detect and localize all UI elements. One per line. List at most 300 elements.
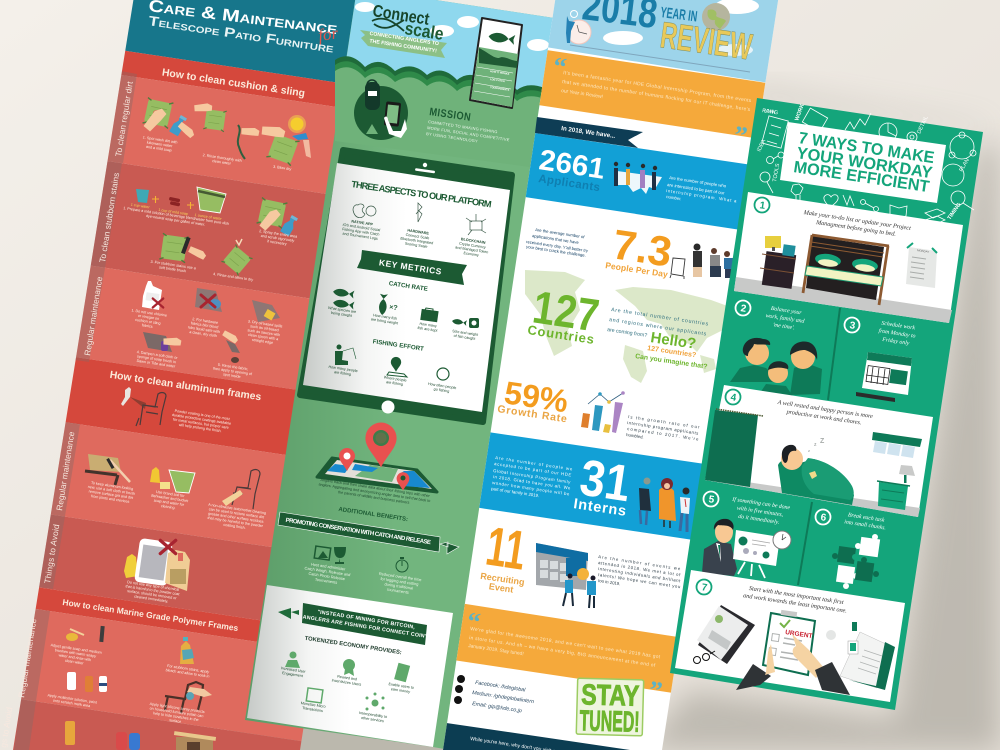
things to avoid: chemicals: that is harmful to the powder coat <box>125 584 180 596</box>
step: spot wash: and a mild soap <box>146 145 172 153</box>
stat: 2661 applicants: Applicants <box>538 173 601 194</box>
tokenized labels <box>280 666 414 724</box>
marine grade steps: For stubborn stains, apply <box>167 664 209 674</box>
title box: MORE EFFICIENT <box>792 158 931 196</box>
tokenized labels: Transactions <box>302 706 323 713</box>
stat: 11 recruiting event: attended in 2018. We met a lot of <box>598 560 681 577</box>
quote intro: that we attended to the number of humans flocking for our IT challenge, here's <box>562 79 751 113</box>
step 4 <box>705 385 933 517</box>
marine grade steps: help to hide scratches in the <box>153 711 199 722</box>
stat: 11 recruiting event: talents! We hope we can meet you <box>598 572 681 589</box>
heading: aluminum frames: How to clean aluminum frames <box>109 370 262 403</box>
benefit: photo release tournaments: Host and administer <box>311 561 346 572</box>
step: do not use chlorine <box>129 281 167 331</box>
title box <box>780 122 946 203</box>
step: maintenance table: To keep aluminum looking <box>91 481 134 491</box>
stat: 31 interns: Global Internship Program family <box>493 468 572 485</box>
header art <box>566 0 759 72</box>
panel: 2018 year in review <box>440 0 800 750</box>
contact links: Email: gip@hde.co.jp <box>472 701 522 714</box>
step: spot wash <box>141 98 196 153</box>
step: soap and bucket: cleaning. <box>161 504 176 510</box>
catch rate: of fish caught <box>453 334 476 341</box>
title box: YOUR WORKDAY <box>795 144 934 182</box>
fishing effort: FISHING EFFORT <box>372 338 424 353</box>
benefit: photo release tournaments: Catch Photo Release <box>308 571 345 581</box>
step 2: work, family and <box>765 312 805 325</box>
catch rate: How many <box>419 322 437 328</box>
stat: 11 recruiting event <box>478 515 681 608</box>
step: spot wash: lukewarm water <box>146 140 173 148</box>
stat: 7.3 people per day: your best to crack the challenge. <box>526 244 586 258</box>
header title: YEAR IN <box>660 4 698 25</box>
step: rinse: clean water <box>212 159 232 166</box>
stat: 11 recruiting event: 11 <box>482 515 530 582</box>
step: mild solution <box>122 187 229 230</box>
step 5 <box>702 492 791 578</box>
step: soap and bucket: Use brand soil for <box>156 490 185 498</box>
powder coating intro: durable protective coatings available <box>172 413 231 426</box>
stat: 127 countries: Are the total number of countries <box>611 307 709 328</box>
step: blot liquid: 2. For hardware <box>192 317 218 325</box>
contact links: Facebook: /hdeglobal <box>475 680 527 694</box>
stat: 59% growth rate <box>497 374 700 442</box>
powder coating intro: Powder coating is one of the most <box>174 409 230 421</box>
step: do not use chlorine: cushion or sling <box>135 318 161 326</box>
quote intro: ” <box>732 120 749 151</box>
stat: 2661 applicants <box>537 144 737 204</box>
closing quote: We're glad for the awesome 2018, and we can't wait to see what 2019 has got <box>470 626 661 660</box>
step 4: 4 <box>730 392 737 404</box>
tagline ribbon: CONNECTING ANGLERS TO <box>369 31 439 47</box>
step: do not use chlorine: 1. Do not use chlorine <box>131 308 167 318</box>
platform items: Fishing App with Catch <box>342 227 380 237</box>
side labels: Regular maintenance <box>82 275 105 356</box>
powder coating intro: for metal surfaces, but proper care <box>173 418 229 430</box>
catch rate: ×? <box>389 304 398 312</box>
step: spray and scrub <box>257 198 299 248</box>
step 5: If something can be done <box>732 497 790 511</box>
tokenized items <box>285 652 410 710</box>
stat: 31 interns: wonder how many people will be <box>492 480 570 497</box>
catch rate: How many fish <box>373 313 397 321</box>
fishing effort: Where people <box>383 375 407 383</box>
step 5: do it immediately. <box>738 514 780 526</box>
step: mild solution: 1 cup of mild soap <box>158 208 188 216</box>
benefit: reduced time: tournaments <box>387 587 409 595</box>
step 6: 6 <box>820 512 827 524</box>
clouds <box>355 2 549 51</box>
step: maintenance table: new, use a soft cloth or brush <box>87 485 136 496</box>
step: dry <box>260 115 311 171</box>
step: chair cleaning: coating finish. <box>223 523 246 530</box>
tokenized labels: Engagement <box>282 671 303 678</box>
step 5: 5 <box>708 494 715 506</box>
side labels <box>0 80 135 748</box>
stay tuned stamp: STAY <box>581 679 640 713</box>
step 3 <box>844 318 917 402</box>
step: detergent and brush: Dawn or Tide and water <box>136 359 176 369</box>
platform items: Crypto Currency <box>459 242 486 250</box>
heading: marine grade polymer frames: How to clean Marine Grade Polymer Frames <box>62 597 239 633</box>
stat: 127 countries: Countries <box>527 322 595 347</box>
world map <box>525 270 733 383</box>
step: chair cleaning: can be used to restore surface dirt <box>209 507 264 519</box>
doodles: TOOLS <box>772 163 781 182</box>
stat: 59% growth rate: Growth Rate <box>497 403 568 425</box>
script word: for: for <box>317 23 340 45</box>
tablet frame <box>300 150 512 422</box>
step 2: Balance your <box>770 306 802 316</box>
phone mockup: HOW IT WORKS <box>490 70 510 76</box>
anglers text: anglers. Aggregating and anonymizing angler data to sell that back to <box>318 482 431 503</box>
stat: 127 countries: and regions where our applicants <box>609 317 707 338</box>
closing quote: “ <box>465 606 482 637</box>
anglers text: Anglers track and then share data about their fishing trips with other <box>320 478 430 498</box>
contact links <box>454 675 534 714</box>
stat: 31 interns: part of our family in 2019. <box>491 486 540 498</box>
additional benefits heading: ADDITIONAL BENEFITS: <box>338 507 408 523</box>
step 7: and work towards the least important one. <box>743 592 847 615</box>
stat: 11 recruiting event: Are the number of events we <box>598 554 681 571</box>
marine grade steps: surface <box>169 718 181 724</box>
key metrics ribbon <box>357 250 467 285</box>
step: spray and scrub: and scrub vigorously <box>260 234 295 243</box>
title box: 7 WAYS TO MAKE <box>797 129 936 167</box>
step 7: 7 <box>701 582 708 594</box>
things to avoid: chemicals: Do not use any type of chemical <box>127 580 179 592</box>
key metrics ribbon: KEY METRICS <box>378 257 443 277</box>
marine grade steps: water and rinse with <box>58 653 91 662</box>
step: do not use chlorine: fabrics <box>142 323 153 329</box>
step 4: z <box>808 448 810 453</box>
stat: 11 recruiting event: Recruiting <box>480 571 525 587</box>
step: spray and scrub: 2. Spray the entire area <box>259 229 298 239</box>
step 1: Managment before going to bed. <box>815 219 896 238</box>
side labels: Regular maintenance <box>16 617 39 698</box>
step: dry oil spills: straight edge <box>252 338 273 345</box>
things to avoid: chemicals <box>124 538 190 605</box>
fishing effort: are fishing <box>334 370 351 377</box>
step: rinse <box>194 102 260 167</box>
stat: 11 recruiting event: interesting individuals and brilliant <box>598 566 681 583</box>
stat: 127 countries <box>527 280 709 371</box>
doodles: PLANNING <box>762 108 778 116</box>
ribbon: in 2018: In 2018, We have... <box>561 125 616 140</box>
platform items: NATIVE APP <box>351 219 374 227</box>
benefit: photo release tournaments: Catch Weigh, Release and <box>304 565 351 577</box>
powder coating intro: will help prolong the finish. <box>179 423 222 433</box>
platform items: Economy <box>463 251 479 257</box>
stat: 31 interns: in 2018. Glad to have you all. We <box>493 474 571 491</box>
stat: 59% growth rate: Is the growth rate of our <box>628 414 700 430</box>
tokenized labels: other services <box>361 716 384 723</box>
stat: 7.3 people per day: Are the average number of <box>535 227 586 239</box>
stat: 11 recruiting event: Event <box>488 581 514 595</box>
side labels: To clean regular dirt <box>113 80 135 157</box>
step: rinse fabric: 5. Rinse the fabric, <box>218 363 249 371</box>
step: do not use chlorine: or vinegar on <box>138 314 159 321</box>
side labels: Regular maintenance <box>54 430 77 511</box>
stat: 59% growth rate: compared to 2017. We're <box>627 426 699 442</box>
platform items: Connect Scale <box>405 233 430 240</box>
logo: Connect <box>371 1 431 29</box>
doodles: WORK <box>794 103 806 122</box>
step: spot wash: 1. Spot wash dirt with <box>143 135 178 145</box>
doodles <box>756 103 976 225</box>
stat: 127 countries: are coming from? <box>607 327 648 339</box>
marine grade steps: onto scratch mark area <box>53 699 91 708</box>
side labels: Things to Avoid <box>42 523 61 584</box>
step: dry oil spills: 3. Dry oil based spills <box>248 319 283 329</box>
step 3: 3 <box>849 320 856 332</box>
panel: connect scale <box>245 0 620 750</box>
phone mockup <box>470 18 522 108</box>
step: blot liquid: fabrics blot blood <box>190 321 219 329</box>
step 5: with in five minutes, <box>736 505 784 518</box>
step: detergent and brush: sponge of soap brush in <box>137 354 176 364</box>
ribbon: in 2018 <box>535 117 643 148</box>
stat: 127 countries: Hello? <box>649 329 697 353</box>
step: rinse and dry <box>213 239 254 282</box>
stat: 7.3 people per day: 7.3 <box>610 220 675 276</box>
marine grade steps: Adjust gentle soap and medium <box>50 643 102 655</box>
benefit: photo release tournaments: Tournaments <box>315 577 338 585</box>
step: soap and bucket: soap and water for <box>153 498 185 507</box>
catch rate: being caught <box>331 311 352 318</box>
mission illustration <box>354 80 408 140</box>
benefit: photo release tournaments <box>303 546 351 587</box>
stat: 2661 applicants: are interested to be part of our <box>667 182 725 196</box>
stat: 31 interns <box>491 449 690 532</box>
divider 5-6 <box>798 502 812 585</box>
doodles: PLAN <box>959 158 971 173</box>
catch rate: What species are <box>328 306 357 314</box>
step: detergent and brush <box>135 332 182 369</box>
mission text: BY USING TECHNOLOGY <box>426 131 478 144</box>
quote intro: our Year in Review! <box>561 88 603 100</box>
tokenized labels: Enable users to <box>388 682 414 690</box>
mission text: MORE FUN, SOCIAL AND COMPETITIVE <box>427 125 510 142</box>
mission heading: MISSION <box>429 106 472 124</box>
conservation banner: PROMOTING CONSERVATION WITH CATCH AND RELEASE <box>285 518 431 546</box>
step: dry oil spills: clean spoon with a <box>248 333 280 341</box>
tokenized labels: Monetize Micro <box>300 701 326 709</box>
panel: care and maintenance <box>2 0 356 750</box>
catch rate: Size and weight <box>452 329 478 337</box>
conservation banner <box>278 512 459 554</box>
stat: 2661 applicants: internship program. What a <box>666 188 737 204</box>
tokenized labels: earn money <box>391 687 411 694</box>
platform items <box>341 203 490 259</box>
mission text: COMMITTED TO MAKING FISHING <box>428 119 498 134</box>
white lower section <box>247 585 453 747</box>
step: soap and bucket: dishwasher and bucket <box>151 494 188 503</box>
closing quote: ” <box>647 675 664 706</box>
step 7 <box>675 570 905 702</box>
things to avoid: chemicals: surface; should be removed or <box>127 589 178 600</box>
marine grade steps: brushes with warm soapy <box>55 648 97 658</box>
fishing effort <box>328 338 457 394</box>
benefit: reduced time: for logging and cutting <box>380 576 419 587</box>
step: soft bristle brush: soft bristle brush <box>159 265 186 273</box>
phone mockup: LOG CATCH <box>490 78 505 83</box>
step 6: into small chunks. <box>844 519 886 532</box>
powder coating intro <box>121 387 232 434</box>
tokenized economy heading: TOKENIZED ECONOMY PROVIDES: <box>304 636 402 656</box>
platform items: iOS and Android Social <box>342 223 381 232</box>
stat: 11 recruiting event: too in 2019. <box>598 578 621 586</box>
step 1: 1 <box>759 200 766 212</box>
panel: 7 ways to make your workday more efficient <box>670 98 983 710</box>
step: soft bristle brush <box>150 233 207 275</box>
step: chair cleaning: A non-abrasive automotive cleaning <box>208 503 266 515</box>
things to avoid: chemicals: cleaned immediately. <box>134 595 168 604</box>
step: mild solution: dye-neutral soap per gallon of water. <box>146 214 205 227</box>
mission text <box>426 119 510 144</box>
stat: 31 interns: Interns <box>572 496 627 520</box>
step 2: 2 <box>740 303 747 315</box>
catch rate: CATCH RATE <box>388 280 428 293</box>
fishing effort: How often people <box>428 382 457 390</box>
fishing effort: go fishing <box>433 387 450 394</box>
step: maintenance table: from joints and crevices <box>91 494 130 504</box>
step 3: from Monday to <box>878 327 916 340</box>
header title: REVIEW <box>658 14 755 68</box>
step: mild solution: 1. Prepare a mild solution of beverage blend/water from pure dish <box>123 206 229 226</box>
platform items: Bluetooth Integrated <box>400 236 434 245</box>
step: mild solution: 1 ounce of water <box>194 213 223 221</box>
tagline ribbon: THE FISHING COMMUNITY! <box>369 38 437 54</box>
step: rinse and dry: 4. Rinse and allow to dry <box>213 272 254 282</box>
platform items: Scoring Scale <box>405 242 428 249</box>
logo: scale <box>403 18 445 44</box>
wave edge <box>335 56 560 171</box>
stat: 2661 applicants: 2661 <box>537 144 607 186</box>
anglers text: the parents of wildlife and business partners <box>338 490 410 505</box>
stay tuned stamp: TUNED! <box>579 705 640 739</box>
platform items: BLOCKCHAIN <box>461 237 486 245</box>
marine grade steps: on household furniture polish can <box>149 706 204 718</box>
step: blot liquid <box>187 288 222 338</box>
stat: 59% growth rate: 59% <box>502 374 571 419</box>
closing quote: January 2019. Stay tuned! <box>468 643 524 657</box>
stat: 7.3 people per day: received every day. Y'all better try <box>526 239 589 253</box>
stat: 59% growth rate: internship program applicants <box>627 420 699 436</box>
phone mockup: TOURNAMENTS <box>490 86 510 92</box>
stat: 2661 applicants: Are the number of people who <box>669 175 727 189</box>
marine grade steps <box>47 626 212 727</box>
fishing effort: How many people <box>328 365 358 373</box>
step: mild solution: 1 cup water <box>130 203 151 210</box>
quote intro: “ <box>551 51 568 82</box>
doodles: DETAIL <box>916 115 930 135</box>
step: dry: 3. Blow dry <box>273 165 292 171</box>
step 6: Break each task <box>848 512 885 524</box>
step: rinse: 2. Rinse thoroughly with <box>202 153 242 163</box>
step 1 <box>734 192 963 323</box>
step 3: Friday only <box>881 337 910 347</box>
step: maintenance table: remove surface grit and dirt <box>88 489 133 500</box>
platform items: HARDWARE <box>407 228 430 236</box>
benefit: reduced time: during traditional <box>384 581 414 591</box>
step: chair cleaning <box>205 470 266 533</box>
stat: 59% growth rate: humbled. <box>626 432 644 440</box>
doodles: IDEA <box>756 138 767 153</box>
step: blot liquid: a clean, dry cloth <box>189 330 217 338</box>
divider 2-3 <box>828 308 840 400</box>
stat: 127 countries: Can you imagine that? <box>635 353 708 371</box>
step: dry oil spills: such as sauces with <box>247 328 280 337</box>
quote ribbon: ANGLERS ARE FISHING FOR CONNECT COIN" <box>302 614 428 640</box>
step: soap and bucket <box>149 467 195 512</box>
marine grade steps: clean water <box>65 659 85 666</box>
tagline ribbon <box>360 30 447 58</box>
step 4: productive at work and chores. <box>785 409 862 426</box>
tokenized labels: Incentivizes Users <box>331 678 362 687</box>
logo <box>371 1 445 44</box>
stay tuned stamp <box>576 678 644 739</box>
marine grade steps: Apply multicolor solution, paint <box>47 693 97 705</box>
quote intro: It's been a fantastic year for HDE Global Internship Program, from the events <box>563 70 752 104</box>
benefit: reduced time: Reduced overall the time <box>379 571 422 582</box>
stat: 31 interns: 31 <box>576 449 634 512</box>
step 4: A well rested and happy person is more <box>777 400 873 420</box>
step: blot liquid: rubs liquid safe with <box>188 325 220 334</box>
quote ribbon <box>278 603 429 645</box>
stat: 31 interns: accepted to be part of our HDE <box>494 461 572 478</box>
step 1: Make your to-do list or update your Project <box>803 209 911 232</box>
things to avoid bottles <box>65 721 216 750</box>
step: chair cleaning: grease and other surface residues <box>208 512 264 524</box>
catch rate <box>327 280 479 341</box>
subtitle: telescope patio furniture: Telescope Patio Furniture <box>148 13 335 56</box>
marine grade steps: bleach and allow to soak in <box>165 668 210 679</box>
step: maintenance table <box>85 454 136 505</box>
step 1: MONDAY <box>917 248 930 254</box>
quote ribbon: "INSTEAD OF MINING FOR BITCOIN, <box>317 609 415 631</box>
step 6 <box>816 510 887 589</box>
map with pins <box>317 423 437 492</box>
tokenized labels: Interoperability to <box>359 711 387 719</box>
fishing effort: are fishing <box>386 380 403 387</box>
platform items: and Tournament Logs <box>342 232 378 241</box>
doodles: TIMING <box>947 202 963 221</box>
step: rinse fabric: spot inside <box>223 372 241 379</box>
quote intro <box>551 51 752 151</box>
step: dry oil spills <box>245 300 283 346</box>
step 4: z <box>814 442 817 448</box>
contact links: Medium: /ghdeglobalintern <box>472 690 534 705</box>
stat: 127 countries: 127 countries? <box>647 345 697 359</box>
stat: 7.3 people per day <box>526 220 734 279</box>
stat: 127 countries: 127 <box>530 280 602 342</box>
tokenized labels: Reward and <box>337 675 357 681</box>
catch rate: fish are kept <box>417 326 438 333</box>
stat: 7.3 people per day: applications that we have <box>532 233 580 245</box>
step: detergent and brush: 4. Dampen a soft cloth or <box>136 350 178 360</box>
step 2 <box>730 300 822 398</box>
marine grade steps: Apply light silicone spray products <box>149 702 205 714</box>
platform items: and Managed Token <box>455 245 489 254</box>
stat: 31 interns: Are the number of people we <box>495 455 573 472</box>
heading: cushion and sling: How to clean cushion & sling <box>161 67 306 100</box>
closing quote: in store for us. And oh – we have a very big, BIG announcement at the end of <box>469 635 656 669</box>
benefit: reduced time <box>376 557 422 596</box>
tokenized labels: Increased User <box>280 666 306 674</box>
side labels: To clean stubborn stains <box>97 172 121 263</box>
step 7: Start with the most important task first <box>748 585 844 606</box>
